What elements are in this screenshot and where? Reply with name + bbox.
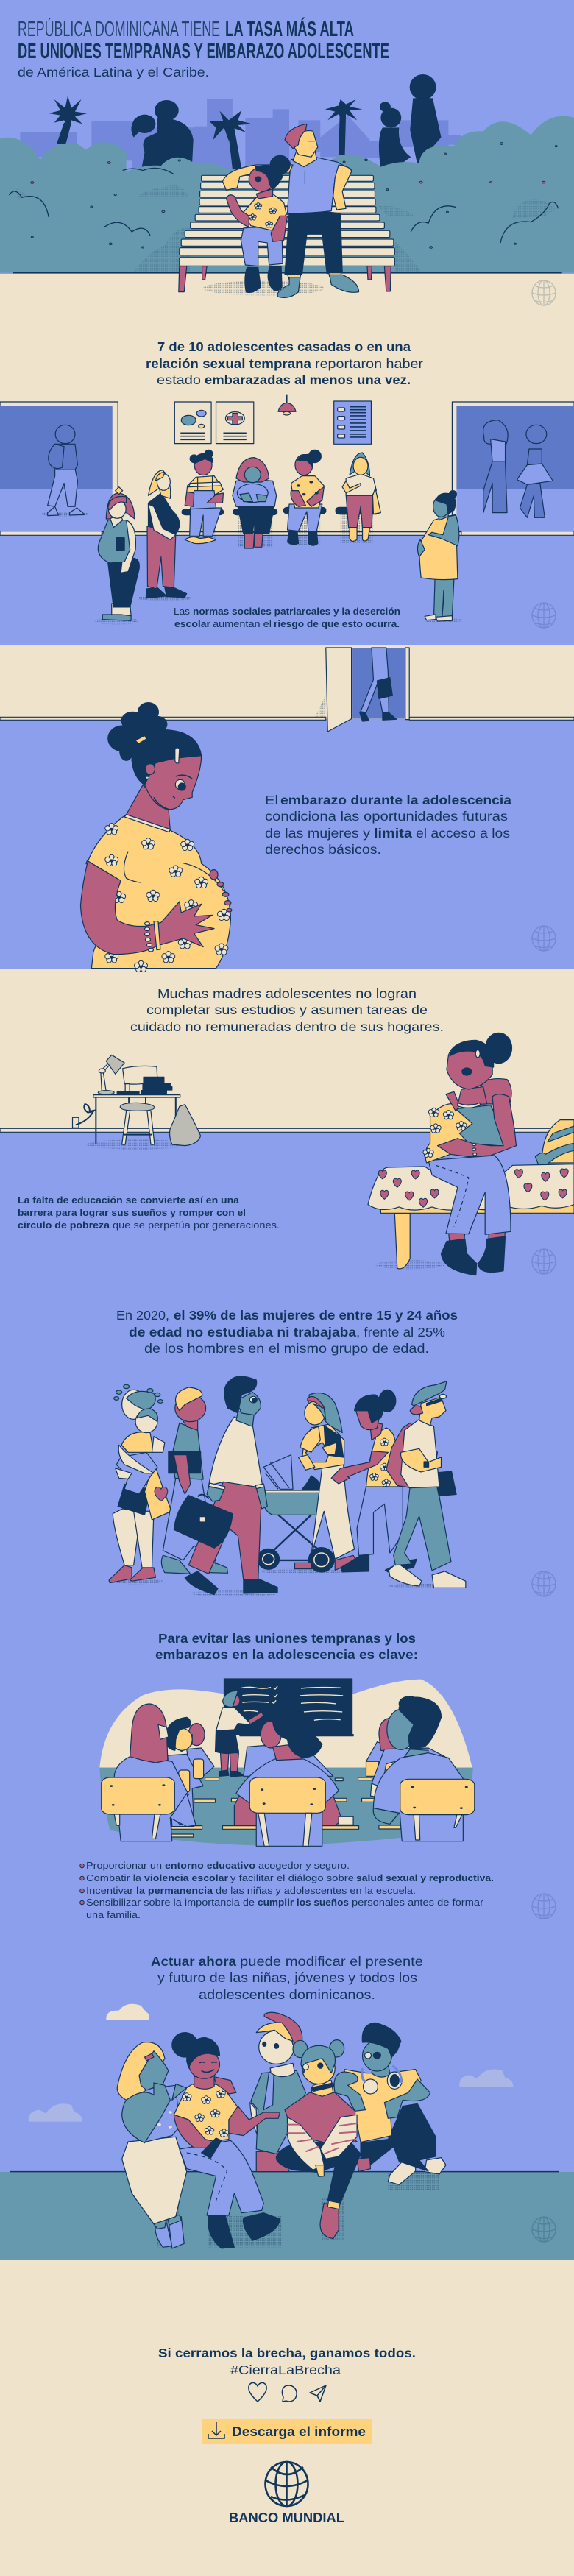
list: bullet recommendations [80, 1860, 494, 1920]
mother with baby [294, 1393, 357, 1570]
hedge shading [16, 185, 556, 272]
mother: boots and jeans [428, 1156, 511, 1275]
seated girl with phone [342, 453, 380, 541]
list: bullet recommendations: personales antes de formar [352, 1897, 484, 1908]
hedge pink berries [31, 143, 557, 248]
closing text [158, 2346, 416, 2377]
bed pillow [535, 1120, 574, 1164]
list: bullet recommendations: cumplir los sueños [258, 1897, 349, 1908]
title: de América Latina y el Caribe. [18, 65, 209, 79]
desks [171, 1777, 401, 1837]
girl carrying child [109, 1384, 171, 1583]
logo: Banco Mundial: BANCO MUNDIAL [229, 2510, 344, 2525]
list: bullet recommendations: Sensibilizar sobre la importancia de [86, 1897, 255, 1908]
list: bullet recommendations: entorno educativo [165, 1860, 255, 1871]
seated girl with overalls [185, 450, 223, 544]
stroller [258, 1455, 339, 1572]
girl with yellow top and jeans [172, 2033, 280, 2248]
text: actuar ahora: y futuro de las niñas, jóvenes y todos los [157, 1970, 417, 1985]
icon: comment bubble [282, 2385, 297, 2402]
button: descarga el informe [202, 2419, 372, 2444]
boy with backpack and hat [386, 1381, 466, 1588]
logo: Banco Mundial [229, 2462, 344, 2525]
list: bullet recommendations: y facilitar el diálogo sobre [230, 1872, 354, 1883]
text: para evitar las uniones: embarazos en la adolescencia es clave: [155, 1647, 418, 1662]
text: 39% de las mujeres: el 39% de las mujeres de entre 15 y 24 años [174, 1308, 458, 1323]
mother: dress [423, 1103, 487, 1163]
text: falta de educacion caption: círculo de pobreza [18, 1220, 110, 1231]
icon: paper plane [310, 2385, 326, 2402]
text: normas sociales caption: normas sociales patriarcales y la deserción [193, 606, 400, 617]
boy with headphones [334, 2023, 446, 2184]
woman: dress flowers [105, 824, 230, 972]
boy with binder [161, 1387, 227, 1574]
panel: pregnant woman close-up [0, 648, 574, 972]
text: muchas madres adolescentes: Muchas madres adolescentes no logran [157, 986, 417, 1001]
text: normas sociales caption: riesgo de que esto ocurra. [274, 618, 400, 629]
text: actuar ahora: puede modificar el presente [240, 1954, 423, 1969]
back row students left [166, 1717, 214, 1827]
girl with teal buns [276, 2040, 361, 2239]
panel: friends sitting on wall [10, 2004, 559, 2248]
list: bullet recommendations: salud sexual y reproductiva. [356, 1872, 494, 1883]
hedge contour lines [9, 168, 559, 243]
panel: opening bench scene [0, 74, 574, 297]
panel: classroom [99, 1679, 475, 1846]
classroom backdrop [99, 1680, 472, 1768]
text: para evitar las uniones [155, 1631, 418, 1662]
man on bench [222, 124, 359, 297]
button: descarga el informe: Descarga el informe [232, 2424, 366, 2439]
text: 39% de las mujeres: En 2020, [116, 1308, 169, 1323]
standing pregnant woman in yellow dress [417, 491, 462, 623]
text: 39% de las mujeres: de los hombres en el mismo grupo de edad. [144, 1341, 429, 1356]
blonde girl covering mouth [117, 2042, 187, 2248]
palm trees [49, 96, 363, 169]
baby [446, 1079, 511, 1146]
text: normas sociales caption: escolar [174, 618, 210, 629]
list: bullet recommendations: una familia. [86, 1909, 141, 1920]
text: actuar ahora [151, 1954, 423, 2002]
wall top line [10, 2171, 559, 2173]
text: falta de educacion caption [18, 1195, 280, 1231]
desk scene [73, 1055, 201, 1150]
icon: download [208, 2422, 224, 2438]
text: muchas madres adolescentes: cuidado no remuneradas dentro de sus hogares. [130, 1019, 444, 1034]
panel: teen mother at home [0, 1033, 574, 1275]
icon: world bank globe [265, 2462, 308, 2506]
skirting board [0, 531, 574, 535]
skirting board [0, 1128, 574, 1132]
standing woman in navy tee [138, 470, 192, 601]
woman: figure [86, 730, 230, 969]
text: actuar ahora: Actuar ahora [151, 1954, 236, 1969]
bench shadows [191, 514, 373, 547]
text: 7 de 10 adolescentes: reportaron haber [315, 356, 423, 371]
poster: medical cross [216, 402, 254, 444]
text: embarazo durante la adolescencia: condiciona las oportunidades futuras [265, 809, 508, 824]
benches [182, 507, 380, 515]
chalkboard [224, 1679, 353, 1736]
text: 7 de 10 adolescentes: relación sexual temprana [146, 356, 311, 371]
globe watermarks [532, 280, 556, 2242]
wall figure shadows [157, 2173, 439, 2247]
list: bullet recommendations: Proporcionar un [86, 1860, 162, 1871]
text: normas sociales caption: aumentan el [213, 618, 272, 629]
teacher [216, 1691, 263, 1777]
text: actuar ahora: adolescentes dominicanos. [199, 1987, 375, 2002]
list: bullet recommendations: Incentivar [86, 1885, 134, 1896]
left window [0, 402, 118, 532]
list: bullet recommendations: la permanencia [136, 1885, 213, 1896]
title: LA TASA MÁS ALTA [225, 16, 354, 41]
text: embarazo durante la adolescencia: de las mujeres y [265, 826, 370, 841]
poster: checklist [334, 401, 371, 444]
woman: hair bun [108, 703, 167, 760]
back row students right [366, 1718, 444, 1797]
list: bullet recommendations: violencia escolar [144, 1872, 228, 1883]
bed [368, 1164, 574, 1269]
woman: bracelets [145, 921, 160, 952]
text: embarazo durante la adolescencia: derechos básicos. [265, 842, 381, 857]
bench [179, 175, 394, 292]
classroom floor [99, 1768, 473, 1846]
title: REPÚBLICA DOMINICANA TIENE [18, 17, 220, 41]
silhouette: pregnant woman [379, 102, 411, 169]
list: bullet recommendations: de las niñas y adolescentes en la escuela. [216, 1885, 416, 1896]
panel: group of young people walking [108, 1376, 466, 1596]
text: 7 de 10 adolescentes: embarazadas al menos una vez. [205, 372, 411, 387]
city skyline [20, 99, 461, 173]
ground shadows [108, 1569, 465, 1596]
closing text: #CierraLaBrecha [230, 2363, 341, 2377]
silhouette: standing man [410, 74, 441, 164]
seated girl looking down [233, 458, 277, 548]
student centre (navy curly hair) [234, 1709, 353, 1846]
text: embarazo durante la adolescencia: El [265, 793, 278, 807]
list: bullet recommendations: acogedor y seguro. [258, 1860, 350, 1871]
icon: heart [249, 2382, 266, 2402]
text: embarazo durante la adolescencia: el acceso a los [416, 826, 510, 841]
text: embarazo durante la adolescencia: embarazo durante la adolescencia [280, 793, 511, 807]
ground line [13, 272, 562, 274]
mother: head and arm [438, 1033, 516, 1157]
text: falta de educacion caption: La falta de educación se convierte así en una [18, 1195, 240, 1206]
woman: arm and hand [80, 861, 214, 955]
student right front (teal skin) [373, 1696, 475, 1841]
text: embarazo durante la adolescencia [265, 793, 511, 857]
standing woman with bag [95, 487, 139, 625]
right window [452, 402, 574, 532]
closing text: Si cerramos la brecha, ganamos todos. [158, 2346, 416, 2360]
text: normas sociales caption: Las [174, 606, 191, 617]
girl on bench [226, 155, 290, 292]
silhouette: embracing couple [131, 100, 194, 171]
title [18, 16, 389, 79]
bench shadow [203, 281, 324, 296]
text: 39% de las mujeres: de edad no estudiaba ni trabajaba [129, 1325, 356, 1340]
text: embarazo durante la adolescencia: limita [374, 826, 412, 841]
boy with cap behind [250, 2012, 305, 2172]
text: muchas madres adolescentes [130, 986, 444, 1034]
woman: hand behind belly [210, 870, 232, 912]
text: 39% de las mujeres [116, 1308, 458, 1356]
text: muchas madres adolescentes: completar sus estudios y asumen tareas de [146, 1002, 428, 1017]
text: 7 de 10 adolescentes [146, 339, 423, 387]
ceiling lamp [278, 395, 296, 415]
poster: virus [174, 402, 211, 444]
text: 39% de las mujeres: , frente al 25% [356, 1325, 445, 1340]
text: para evitar las uniones: Para evitar las uniones tempranas y los [158, 1631, 416, 1646]
text: 7 de 10 adolescentes: 7 de 10 adolescentes casadas o en una [157, 339, 411, 354]
text: falta de educacion caption: barrera para lograr sus sueños y romper con el [18, 1207, 246, 1218]
door opening with walking figure [315, 648, 409, 732]
bullet markers [80, 1864, 84, 1905]
text: falta de educacion caption: que se perpetúa por generaciones. [113, 1220, 280, 1231]
text: normas sociales caption [174, 606, 400, 629]
list: bullet recommendations: Combatir la [86, 1872, 142, 1883]
skirting board [0, 717, 574, 720]
panel: waiting room [0, 395, 574, 625]
man with briefcase [174, 1376, 277, 1595]
hedge [0, 116, 574, 273]
clouds [29, 2004, 513, 2122]
woman pushing stroller [331, 1390, 417, 1572]
text: 7 de 10 adolescentes: estado [157, 372, 201, 387]
seated girl with curly bun [288, 450, 324, 545]
student left front (rose hair) [102, 1704, 196, 1841]
